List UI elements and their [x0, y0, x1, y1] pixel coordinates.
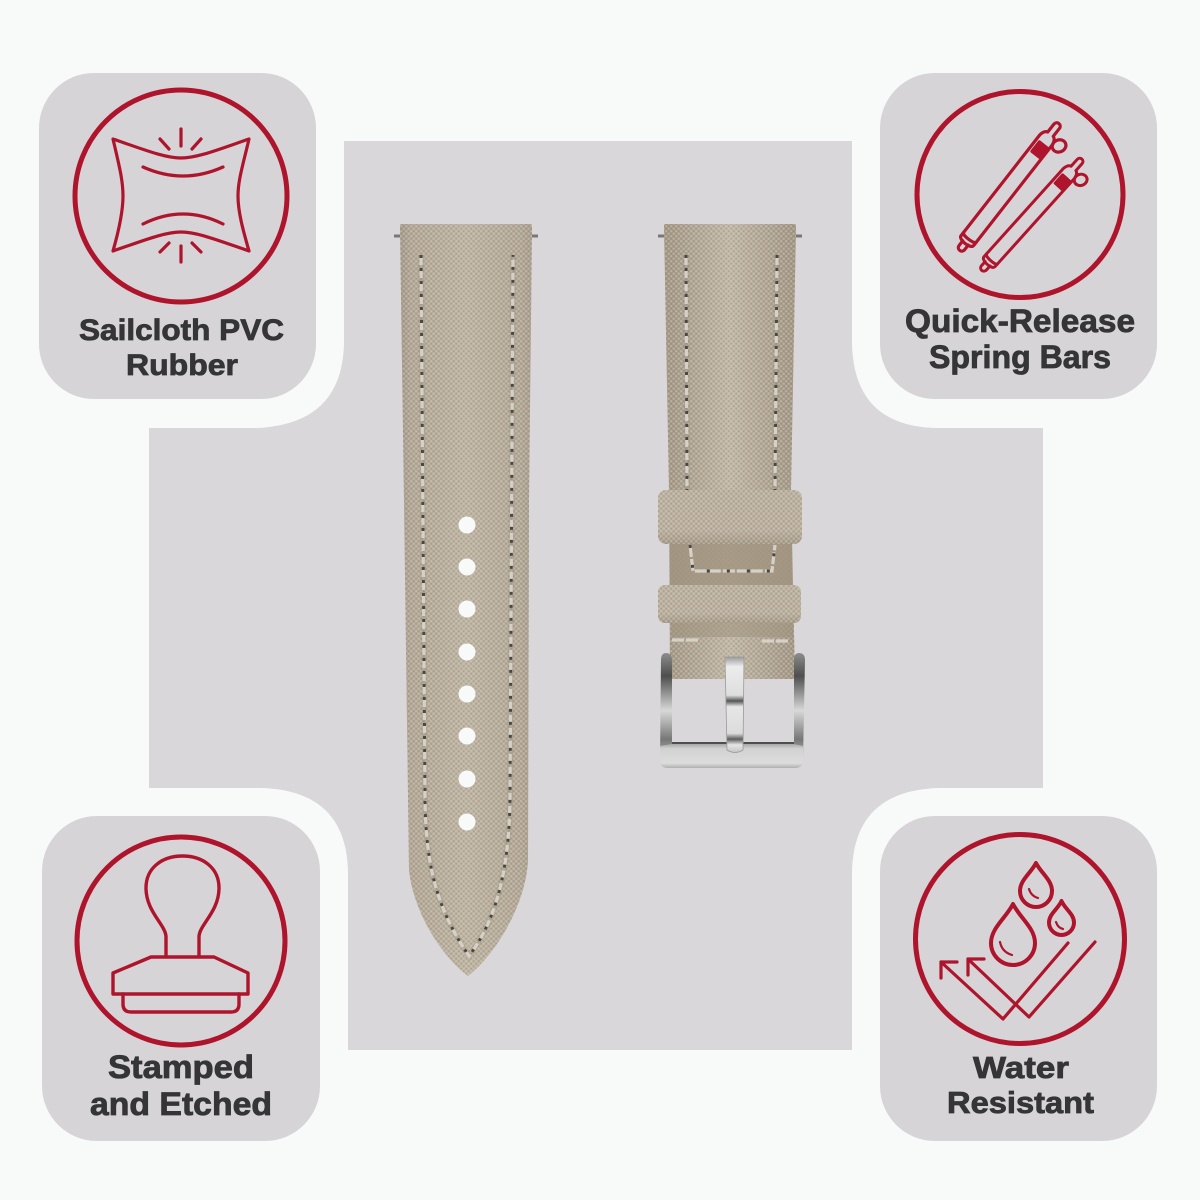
stitching	[686, 255, 777, 490]
label: Quick-Release	[905, 303, 1135, 339]
card panel	[880, 816, 1157, 1141]
card: water resistant	[852, 788, 1200, 1176]
label: Sailcloth PVC	[79, 314, 284, 347]
lower stitching	[672, 545, 790, 641]
icon: stretched sailcloth	[75, 90, 287, 302]
stitch groove	[421, 255, 513, 956]
keeper one	[658, 490, 802, 544]
watch strap: buckle piece	[658, 224, 805, 768]
card panel	[880, 73, 1157, 399]
label	[905, 303, 1135, 375]
halo	[852, 788, 1200, 1176]
label: Resistant	[947, 1085, 1094, 1120]
label: Spring Bars	[929, 339, 1111, 375]
icon: hand stamp	[77, 837, 285, 1045]
halo	[852, 40, 1200, 428]
label: Stamped	[108, 1049, 254, 1085]
buckle frame	[660, 653, 805, 768]
bar one	[953, 119, 1077, 264]
label: Water	[973, 1050, 1069, 1085]
icon: water drops repelled	[916, 834, 1124, 1044]
watch strap: long piece	[394, 224, 538, 976]
icon: spring bars	[917, 92, 1123, 298]
stitching	[421, 255, 513, 956]
halo	[0, 40, 344, 428]
buckle tongue	[725, 657, 744, 752]
label	[90, 1049, 272, 1122]
stitch groove	[686, 255, 777, 490]
card panel	[39, 73, 316, 399]
strap body	[664, 224, 796, 679]
buckle bottom bar	[660, 744, 803, 768]
label: Rubber	[126, 349, 238, 382]
label: and Etched	[90, 1086, 272, 1122]
halo	[0, 788, 348, 1176]
background panel	[149, 141, 1043, 1050]
label	[947, 1050, 1094, 1120]
strap texture	[664, 224, 796, 679]
bar two	[976, 154, 1098, 284]
label	[79, 314, 284, 382]
spring bar ends	[658, 234, 802, 238]
card: sailcloth PVC rubber	[0, 40, 344, 428]
strap body	[400, 224, 532, 976]
card: quick-release spring bars	[852, 40, 1200, 428]
card: stamped and etched	[0, 788, 348, 1176]
keeper two	[658, 585, 801, 623]
buckle inner shadow line	[672, 742, 794, 744]
strap holes	[458, 516, 476, 830]
card panel	[42, 816, 320, 1141]
spring bar ends	[394, 234, 538, 238]
shaded area between keepers	[670, 543, 792, 585]
strap texture	[400, 224, 532, 976]
